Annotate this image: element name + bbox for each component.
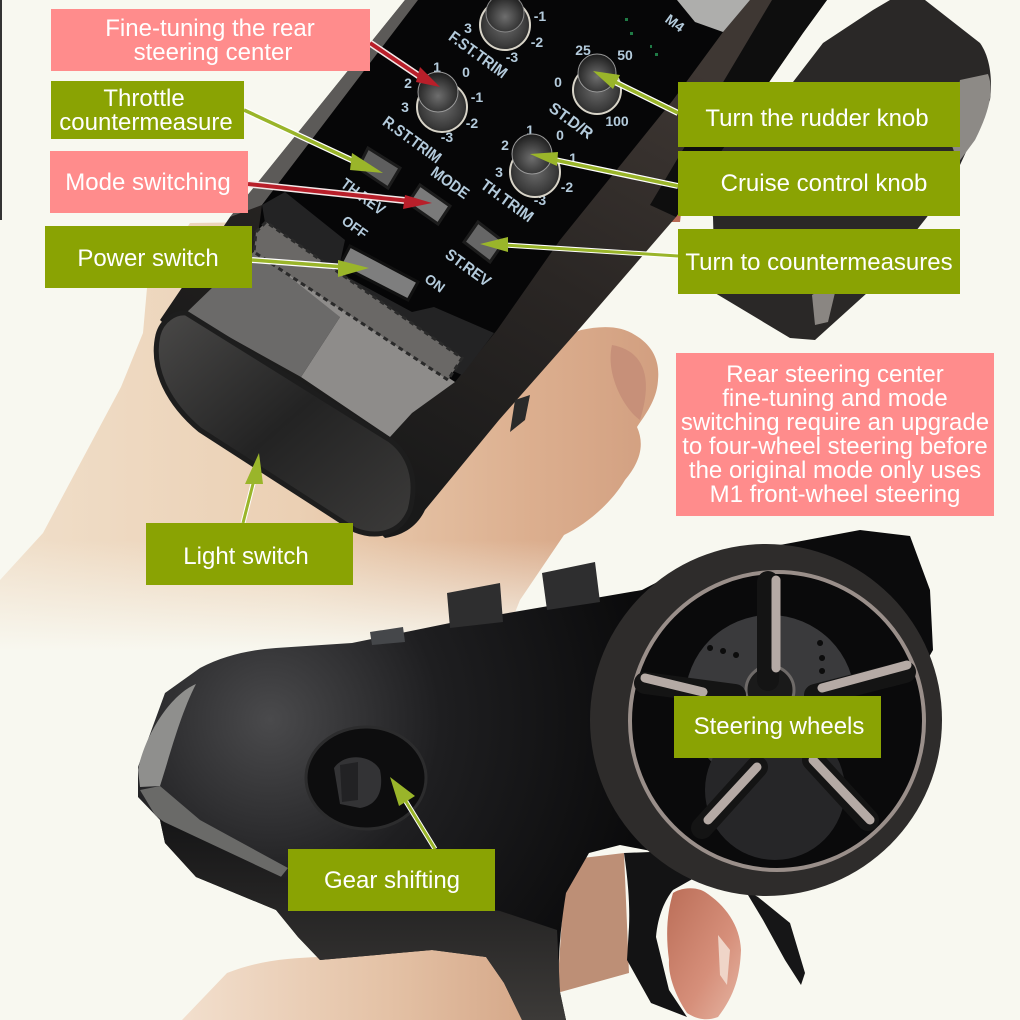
steering wheel [590,544,942,896]
panel printed labels: 3 [401,99,409,115]
panel printed labels: 25 [575,42,591,58]
knobs [417,0,621,197]
panel printed labels: -1 [534,8,546,24]
label: fine-tuning rear steering center: steering center [134,39,292,66]
gray plate [677,0,750,32]
note: four-wheel steering upgrade: to four-wheel steering before [682,433,988,460]
panel printed labels: -3 [506,49,518,65]
panel printed labels: MODE [427,164,472,203]
note: four-wheel steering upgrade: M1 front-wheel steering [710,481,960,508]
label: throttle countermeasure: Throttle [103,85,185,112]
panel printed labels: -1 [471,89,483,105]
arrow: rudder knob [593,71,678,113]
dark lower panel [262,192,494,375]
panel printed labels: 3 [495,164,503,180]
panel printed labels: TH.REV [337,176,388,219]
black control panel [256,0,750,382]
gray lower panels [230,250,455,437]
note: four-wheel steering upgrade: switching require an upgrade [681,409,989,436]
label: turn the rudder knob [678,82,960,147]
panel printed labels: M4 [662,11,688,35]
label: fine-tuning rear steering center [51,9,370,71]
indicator dots [625,18,658,56]
top controller body [160,0,827,538]
label: mode switching: Mode switching [65,169,231,196]
panel printed labels: ON [422,270,448,296]
label: power switch: Power switch [77,245,219,272]
note: four-wheel steering upgrade [676,353,994,516]
label: steering wheels [674,696,881,758]
top hand [0,205,682,652]
panel printed labels: ST.D/R [545,100,596,143]
panel printed labels: 50 [617,47,633,63]
label: turn to countermeasures: Turn to countermeasures [685,249,953,276]
note: four-wheel steering upgrade: fine-tuning and mode [722,385,948,412]
panel printed labels: ST.REV [442,246,494,291]
label: throttle countermeasure: countermeasure [59,109,233,136]
label: cruise control knob [678,151,960,216]
panel printed labels: F.ST.TRIM [445,28,510,82]
label: turn the rudder knob: Turn the rudder knob [705,105,929,132]
label: steering wheels: Steering wheels [694,713,864,740]
label: throttle countermeasure [51,81,244,139]
panel printed labels [337,8,688,296]
gear switch [306,727,426,829]
arrow: mode switching [248,184,432,209]
arrow: gear shifting [390,777,435,849]
arrow: throttle countermeasure [244,110,383,173]
panel printed labels: 0 [556,127,564,143]
panel printed labels: 3 [464,20,472,36]
panel printed labels: -3 [441,129,453,145]
note: four-wheel steering upgrade: the original mode only uses [689,457,981,484]
arrow: light switch [243,453,263,523]
panel printed labels: -2 [531,34,543,50]
label: mode switching [50,151,248,213]
note: four-wheel steering upgrade: Rear steering center [726,361,944,388]
panel printed labels: R.ST.TRIM [379,113,444,167]
arrow: power switch [252,260,369,277]
panel printed labels: -3 [534,192,546,208]
top controller: wheel edge [690,0,991,340]
panel printed labels: 0 [462,64,470,80]
panel printed labels: 1 [433,59,441,75]
panel printed labels: 2 [501,137,509,153]
label: turn to countermeasures [678,229,960,294]
bottom controller body [138,530,933,1020]
top knobs [447,583,503,628]
panel printed labels: 1 [526,122,534,138]
panel printed labels: TH.TRIM [477,177,536,226]
arrow: cruise control knob [530,152,678,186]
outer black strip [650,0,827,217]
panel printed labels: -2 [466,115,478,131]
battery cap [156,313,530,534]
grip shading [160,820,566,1020]
arrows: red [248,43,440,209]
arrow: rear steering trim [370,43,440,87]
label: cruise control knob: Cruise control knob [721,170,927,197]
trigger [624,850,805,1017]
carbon strip [254,222,462,380]
arrow: steering countermeasure [480,237,678,256]
bottom hand [182,853,741,1020]
panel printed labels: OFF [339,212,371,242]
panel printed labels: 2 [404,75,412,91]
arrows: green [243,71,678,849]
label: light switch: Light switch [183,543,309,570]
label: gear shifting [288,849,495,911]
panel printed labels: -2 [561,179,573,195]
panel printed labels: 1 [569,150,577,166]
label: gear shifting: Gear shifting [324,867,460,894]
panel printed labels: 0 [554,74,562,90]
panel printed labels: 100 [605,113,629,129]
label: power switch [45,226,252,288]
front nose highlight [138,684,196,787]
label: fine-tuning rear steering center: Fine-tuning the rear [105,15,315,42]
label: light switch [146,523,353,585]
switches [340,148,504,300]
